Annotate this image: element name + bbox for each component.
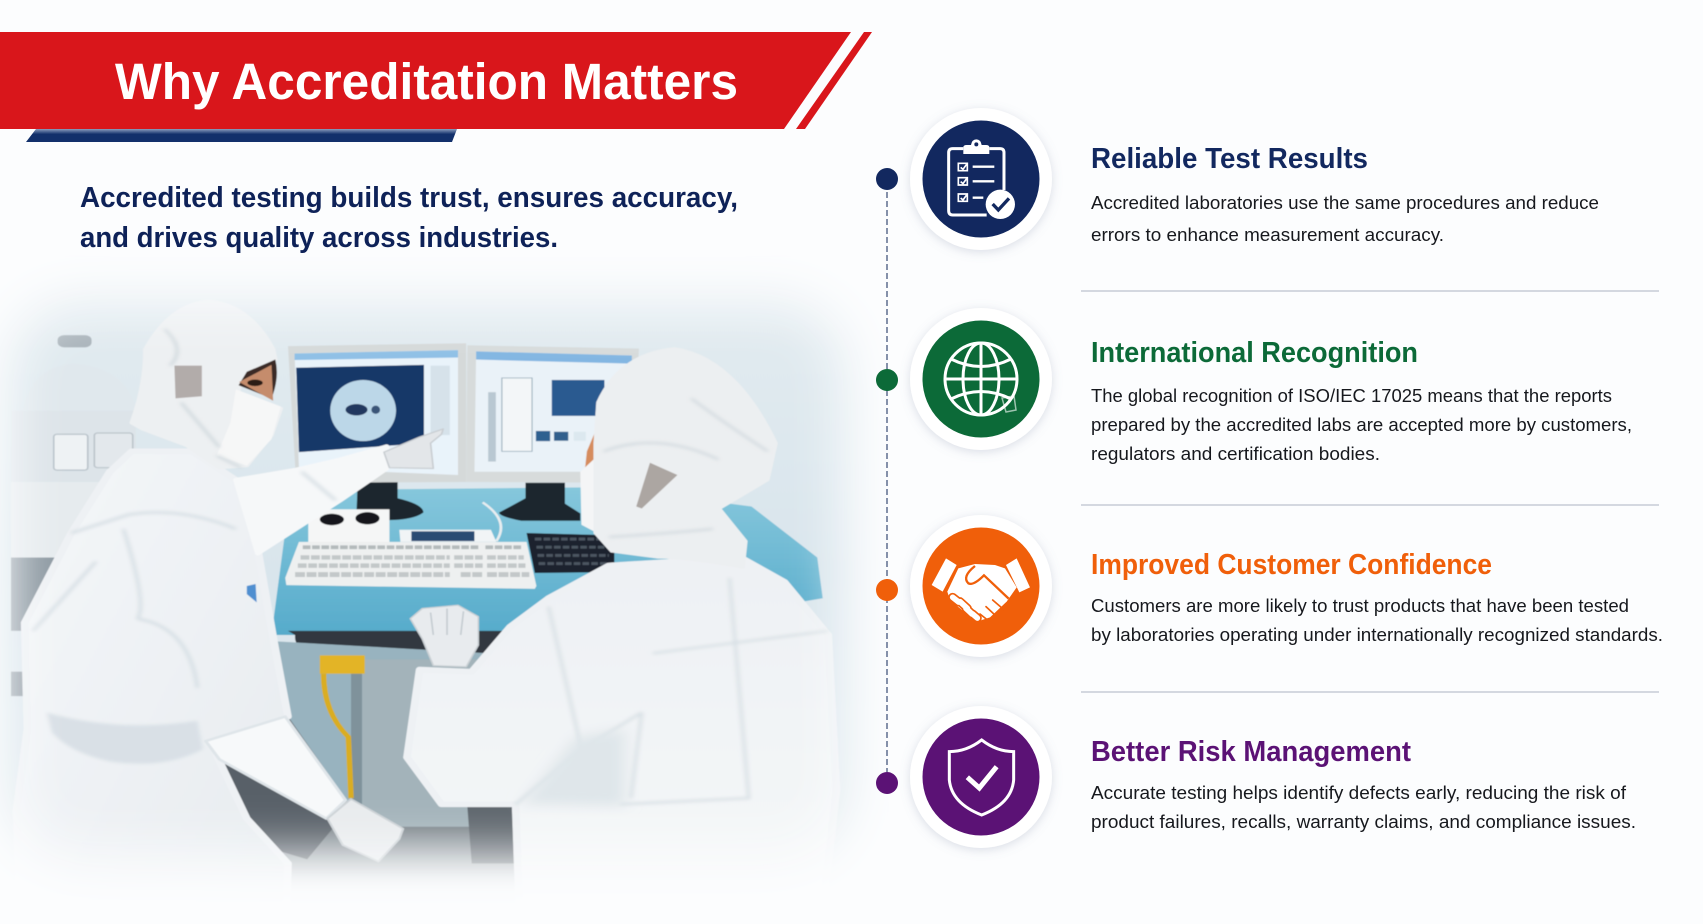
title banner <box>0 32 872 142</box>
left technician hood and mask <box>132 301 281 468</box>
title: Why Accreditation Matters <box>115 53 738 110</box>
white keyboard <box>285 542 536 589</box>
subheading <box>80 182 738 254</box>
icon: shield with check <box>910 706 1052 848</box>
dividers <box>1081 291 1659 692</box>
black keyboard <box>527 533 614 573</box>
heading: Reliable Test Results <box>1091 143 1368 175</box>
lab wall background <box>0 292 862 832</box>
icon: handshake <box>910 515 1052 657</box>
description: errors to enhance measurement accuracy. <box>1091 224 1444 245</box>
red ribbon <box>0 32 851 129</box>
dark stool base <box>467 806 514 864</box>
description: regulators and certification bodies. <box>1091 443 1380 464</box>
item: improved customer confidence <box>910 515 1663 657</box>
description: product failures, recalls, warranty claims, and compliance issues. <box>1091 811 1636 832</box>
description <box>1091 782 1636 832</box>
timeline connector <box>886 192 888 772</box>
left technician pointing arm <box>236 446 387 553</box>
right technician hood <box>595 349 776 568</box>
description: Customers are more likely to trust products that have been tested <box>1091 595 1629 616</box>
description <box>1091 385 1632 464</box>
photo: lab technicians at monitors <box>0 292 862 880</box>
heading: Better Risk Management <box>1091 736 1411 768</box>
description: Accurate testing helps identify defects early, reducing the risk of <box>1091 782 1627 803</box>
subheading: Accredited testing builds trust, ensures accuracy, <box>80 182 738 214</box>
icon: clipboard with check <box>910 108 1052 250</box>
right technician body in white suit <box>402 556 839 878</box>
right monitor <box>466 345 639 521</box>
description <box>1091 595 1663 645</box>
description: prepared by the accredited labs are accepted more by customers, <box>1091 414 1632 435</box>
left technician lower sleeve <box>206 717 346 819</box>
item: reliable test results <box>910 108 1599 250</box>
description: by laboratories operating under internationally recognized standards. <box>1091 624 1663 645</box>
heading: Improved Customer Confidence <box>1091 549 1492 581</box>
left technician glove pointing <box>384 429 443 468</box>
dark gap under left arm <box>224 719 332 860</box>
item: international recognition <box>910 308 1632 464</box>
right technician glove on desk <box>410 605 478 667</box>
item: better risk management <box>910 706 1636 848</box>
desk <box>272 487 823 896</box>
right technician face and mask <box>580 434 594 532</box>
timeline dots <box>876 168 898 794</box>
description: Accredited laboratories use the same procedures and reduce <box>1091 192 1599 213</box>
left technician lower glove <box>327 799 403 861</box>
left monitor <box>288 343 466 520</box>
heading: International Recognition <box>1091 337 1418 369</box>
icon: globe <box>910 308 1052 450</box>
left technician body in white suit <box>16 451 288 924</box>
red slash accent <box>796 32 872 129</box>
navy strip below banner <box>26 129 457 142</box>
description: The global recognition of ISO/IEC 17025 means that the reports <box>1091 385 1612 406</box>
subheading: and drives quality across industries. <box>80 222 558 254</box>
lab machine on the left <box>11 335 137 696</box>
description <box>1091 192 1599 245</box>
desk knob box and paper <box>308 509 496 543</box>
